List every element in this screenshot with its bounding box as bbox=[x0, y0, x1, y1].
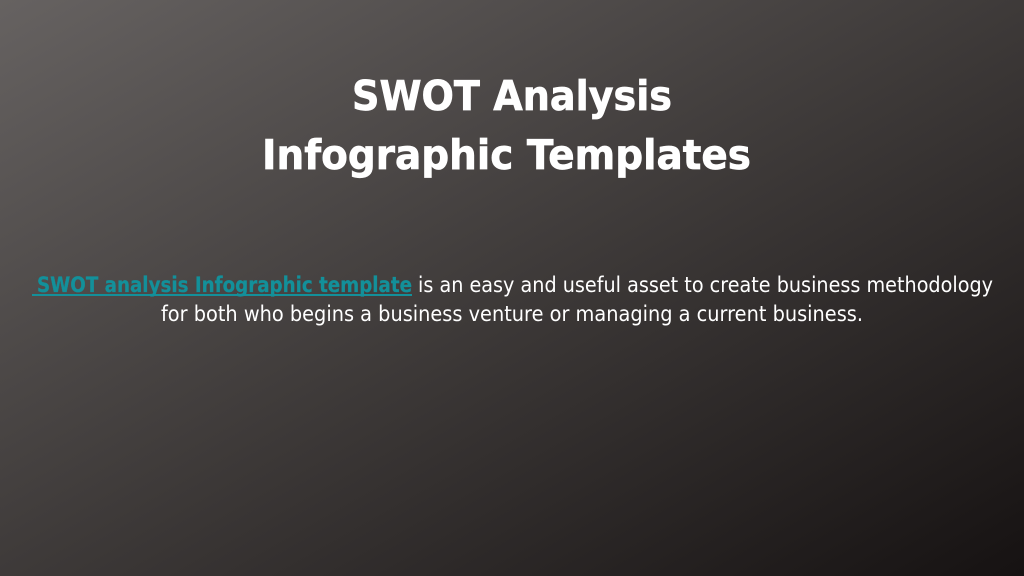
title: SWOT Analysis bbox=[352, 72, 672, 120]
description text bbox=[32, 273, 993, 326]
title: Infographic Templates bbox=[262, 131, 751, 179]
description text: for both who begins a business venture or managing a current business. bbox=[161, 302, 863, 326]
title bbox=[262, 72, 751, 179]
link: SWOT analysis Infographic template: SWOT analysis Infographic template bbox=[37, 273, 412, 297]
